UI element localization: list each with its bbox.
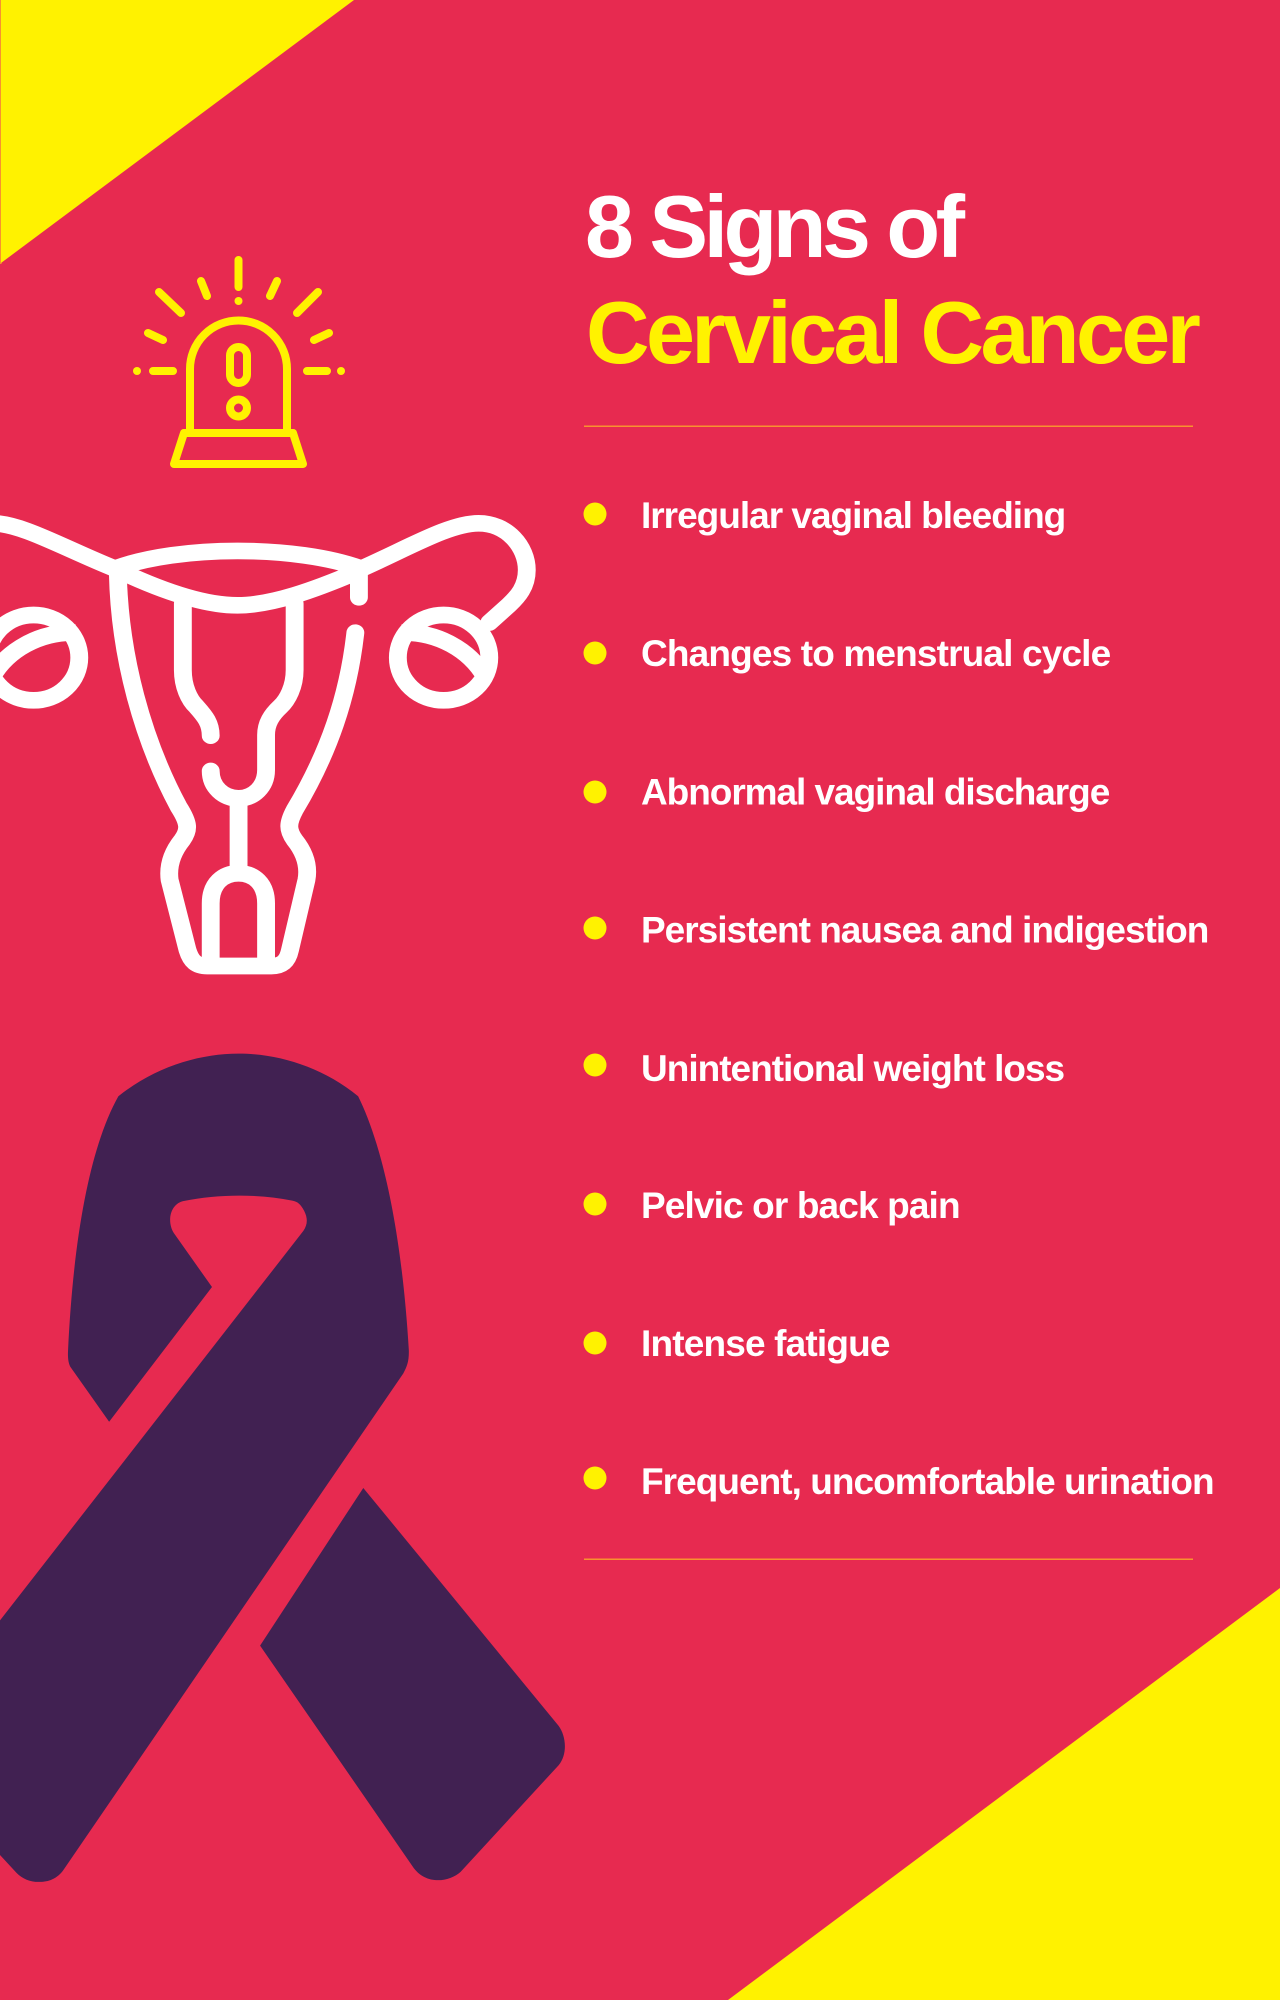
- item 8: Frequent, uncomfortable urination: [641, 1461, 1214, 1502]
- item 7: Intense fatigue: [641, 1323, 890, 1364]
- item 3: Abnormal vaginal discharge: [641, 772, 1110, 812]
- title: 8 Signs of: [585, 177, 966, 276]
- item 5: Unintentional weight loss: [641, 1048, 1065, 1089]
- item 1: Irregular vaginal bleeding: [641, 495, 1065, 536]
- icon: awareness ribbon: [0, 1054, 565, 1882]
- item 6: Pelvic or back pain: [641, 1185, 960, 1226]
- item 4: Persistent nausea and indigestion: [641, 910, 1208, 950]
- title: [585, 177, 1200, 382]
- item 2: Changes to menstrual cycle: [641, 633, 1111, 674]
- icon: uterus outline: [0, 523, 527, 966]
- title: Cervical Cancer: [586, 283, 1200, 382]
- icon: alarm siren: [133, 260, 345, 464]
- yellow corner triangle top left: [1, 0, 354, 263]
- yellow corner triangle bottom right: [728, 1588, 1280, 2000]
- symptom list: [584, 495, 1214, 1502]
